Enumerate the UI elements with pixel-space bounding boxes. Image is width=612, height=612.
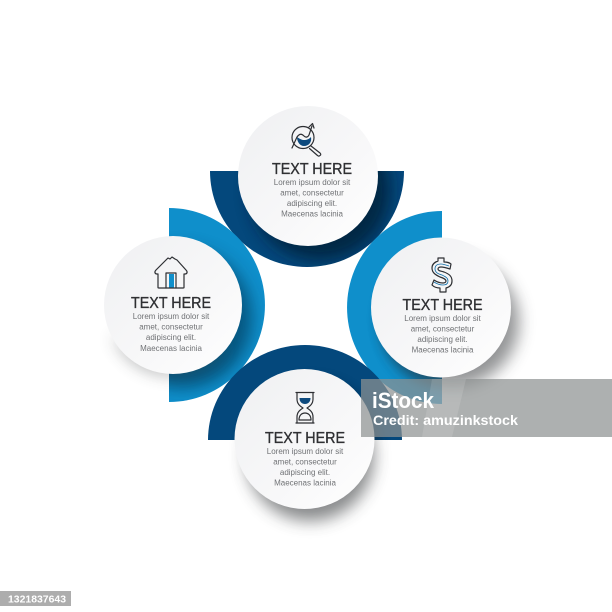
- panel: right circle: [371, 238, 511, 378]
- panel: top circle: [238, 106, 378, 246]
- image id label: [0, 591, 71, 606]
- text block: Maecenas lacinia: [274, 478, 336, 488]
- text block: Lorem ipsum dolor sit: [404, 314, 482, 323]
- text block: Maecenas lacinia: [281, 210, 343, 218]
- watermark: iStock credit banner: [361, 379, 612, 437]
- image id label: 1321837643: [8, 594, 66, 606]
- icon: hourglass: [296, 392, 314, 423]
- shadow: bottom circle: [246, 391, 374, 521]
- panel: left circle: [104, 236, 242, 374]
- text block: adipiscing elit.: [287, 199, 337, 208]
- text block: adipiscing elit.: [417, 335, 468, 344]
- text block: [274, 178, 351, 218]
- text block: [404, 314, 482, 354]
- panel: top half ring: [210, 171, 404, 267]
- text block: amet, consectetur: [280, 188, 344, 198]
- icon: dollar sign: [432, 258, 452, 292]
- text block: Lorem ipsum dolor sit: [133, 312, 210, 321]
- text block: adipiscing elit.: [280, 468, 330, 477]
- text block: amet, consectetur: [139, 322, 203, 332]
- text block: adipiscing elit.: [146, 333, 196, 342]
- watermark: iStock credit banner: Credit: amuzinkstock: [373, 413, 519, 428]
- text block: amet, consectetur: [411, 324, 475, 334]
- heading: TEXT HERE: [131, 295, 211, 312]
- text block: Lorem ipsum dolor sit: [267, 447, 344, 456]
- shadow: left circle: [112, 335, 228, 375]
- heading: TEXT HERE: [265, 430, 345, 447]
- text block: Maecenas lacinia: [140, 344, 202, 353]
- text block: Maecenas lacinia: [412, 346, 474, 354]
- panel: bottom circle: [234, 369, 374, 509]
- panel: left half ring: [169, 208, 265, 402]
- text block: [267, 447, 344, 488]
- shadow: right circle: [385, 257, 519, 387]
- heading: TEXT HERE: [272, 161, 352, 178]
- icon: magnifier with chart: [292, 124, 321, 156]
- icon: house: [155, 257, 187, 288]
- text block: [133, 312, 210, 353]
- heading: TEXT HERE: [402, 297, 482, 314]
- watermark: iStock credit banner: iStock: [372, 388, 435, 413]
- panel: right half ring: [347, 211, 442, 404]
- text block: Lorem ipsum dolor sit: [274, 178, 351, 187]
- panel: bottom half ring: [208, 345, 402, 440]
- text block: amet, consectetur: [273, 458, 337, 466]
